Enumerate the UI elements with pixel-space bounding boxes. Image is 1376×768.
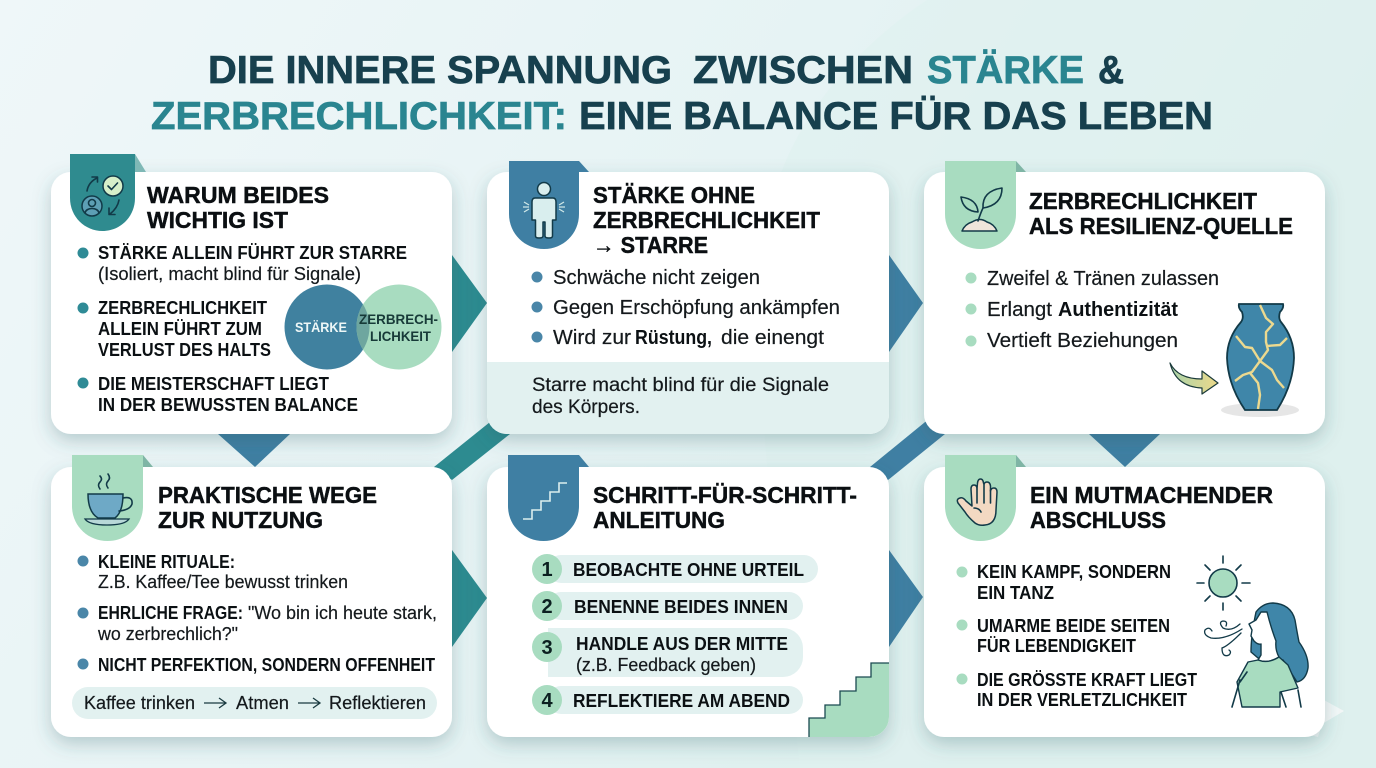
ribbon with cup icon: [72, 455, 153, 541]
bullet list: ZERBRECHLICHKEIT: [98, 298, 267, 318]
panel: zerbrechlichkeit als resilienz-quelle: [924, 161, 1325, 434]
heading: [1030, 482, 1273, 533]
heading: → STARRE: [593, 232, 708, 258]
bullet list: FÜR LEBENDIGKEIT: [977, 636, 1136, 656]
decorative end marker: [1310, 699, 1344, 737]
heading: ZUR NUTZUNG: [158, 507, 323, 533]
bullet list: Authentizität: [1058, 299, 1178, 321]
bullet list: [956, 562, 1197, 710]
heading: WARUM BEIDES: [147, 182, 329, 208]
bullet list: DIE GRÖSSTE KRAFT LIEGT: [977, 670, 1197, 690]
step 4: [532, 685, 803, 715]
arrow: diagonal card 2 to card 4: [434, 418, 510, 480]
flow pill: [72, 687, 437, 719]
ribbon with sprout icon: [945, 161, 1026, 249]
arrow: card 1 down to card 4: [218, 434, 290, 467]
bullet list: (Isoliert, macht blind für Signale): [98, 264, 361, 284]
bullet list: NICHT PERFEKTION, SONDERN OFFENHEIT: [98, 655, 435, 675]
footer note: [487, 362, 889, 434]
step 4: 4: [541, 690, 553, 712]
step 1: BEOBACHTE OHNE URTEIL: [573, 560, 804, 580]
panel: ein mutmachender abschluss: [924, 455, 1325, 737]
title: EINE BALANCE FÜR DAS LEBEN: [579, 95, 1213, 138]
heading: [1029, 188, 1293, 239]
step 3: 3: [541, 637, 553, 659]
ribbon with hand icon: [945, 455, 1026, 541]
ribbon with standing person icon: [509, 161, 589, 249]
step 2: BENENNE BEIDES INNEN: [574, 597, 788, 617]
flow pill: Kaffee trinken: [84, 693, 195, 713]
arrow: diagonal card 3 to card 5: [870, 418, 945, 480]
arrow: card 4 to card 5: [452, 550, 487, 647]
bullet list: ALLEIN FÜHRT ZUM: [98, 319, 262, 339]
step 3: HANDLE AUS DER MITTE: [576, 634, 788, 654]
heading: ALS RESILIENZ-QUELLE: [1029, 213, 1293, 239]
bullet list: Zweifel & Tränen zulassen: [987, 268, 1219, 290]
heading: ABSCHLUSS: [1030, 507, 1166, 533]
bullet list: UMARME BEIDE SEITEN: [977, 616, 1170, 636]
heading: SCHRITT-FÜR-SCHRITT-: [593, 482, 857, 508]
heading: [593, 182, 820, 258]
icon: kintsugi vase: [1221, 304, 1299, 417]
bullet list: die einengt: [721, 327, 824, 349]
bullet list: Gegen Erschöpfung ankämpfen: [553, 297, 840, 319]
heading: [593, 482, 857, 533]
bullet list: EIN TANZ: [977, 583, 1054, 603]
title: &: [1098, 49, 1124, 92]
panel: warum beides wichtig ist: [51, 154, 452, 434]
bullet list: KLEINE RITUALE:: [98, 552, 235, 572]
flow pill: Atmen: [236, 693, 289, 713]
footer note: Starre macht blind für die Signale: [532, 375, 829, 396]
arrow: card 2 to card 3: [889, 255, 923, 352]
step 2: [532, 591, 803, 621]
title: [151, 49, 1213, 138]
venn diagram: ZERBRECH-: [359, 311, 438, 327]
bullet list: IN DER VERLETZLICHKEIT: [977, 690, 1187, 710]
bullet list: KEIN KAMPF, SONDERN: [977, 562, 1171, 582]
step 1: [532, 554, 818, 584]
venn diagram: LICHKEIT: [370, 328, 431, 344]
bullet list: STÄRKE ALLEIN FÜHRT ZUR STARRE: [98, 243, 407, 263]
venn diagram: STÄRKE: [295, 319, 347, 335]
ribbon with stairs icon: [508, 455, 589, 541]
step 2: 2: [541, 596, 553, 618]
corner stairs: [809, 663, 889, 737]
bullet list: "Wo bin ich heute stark,: [248, 603, 437, 623]
venn diagram: [284, 284, 442, 370]
step 3: [532, 628, 803, 677]
footer note: des Körpers.: [532, 397, 640, 418]
heading: [158, 482, 377, 533]
title: STÄRKE: [927, 49, 1084, 92]
arrow: card 3 down to card 6: [1089, 434, 1160, 467]
title: ZWISCHEN: [693, 49, 913, 92]
bullet list: [78, 552, 437, 675]
heading: WICHTIG IST: [147, 207, 288, 233]
bullet list: EHRLICHE FRAGE:: [98, 603, 243, 623]
panel: praktische wege zur nutzung: [51, 455, 452, 737]
bullet list: Vertieft Beziehungen: [987, 330, 1178, 352]
heading: PRAKTISCHE WEGE: [158, 482, 377, 508]
arrow: card 5 to card 6: [889, 550, 923, 647]
bullet list: Erlangt: [987, 299, 1052, 321]
heading: [147, 182, 329, 233]
step 4: REFLEKTIERE AM ABEND: [573, 691, 790, 711]
icon: curved arrow: [1170, 363, 1218, 394]
flow pill: Reflektieren: [329, 693, 426, 713]
heading: ZERBRECHLICHKEIT: [1029, 188, 1257, 214]
bullet list: [966, 268, 1219, 352]
panel: schritt-fuer-schritt-anleitung: [487, 455, 889, 737]
bullet list: Rüstung,: [635, 327, 712, 349]
step 3: (z.B. Feedback geben): [576, 655, 756, 675]
bullet list: Z.B. Kaffee/Tee bewusst trinken: [98, 572, 348, 592]
bullet list: [78, 243, 407, 415]
heading: ANLEITUNG: [593, 507, 725, 533]
bullet list: wo zerbrechlich?": [97, 624, 238, 644]
heading: STÄRKE OHNE: [593, 182, 755, 208]
icon: sun: [1197, 556, 1250, 610]
bullet list: IN DER BEWUSSTEN BALANCE: [98, 395, 358, 415]
heading: ZERBRECHLICHKEIT: [593, 207, 820, 233]
bullet list: [532, 267, 840, 349]
bullet list: DIE MEISTERSCHAFT LIEGT: [98, 374, 329, 394]
bullet list: Schwäche nicht zeigen: [553, 267, 760, 289]
step 1: 1: [541, 559, 553, 581]
bullet list: Wird zur: [553, 327, 631, 349]
icon: woman breathing: [1205, 603, 1308, 707]
ribbon with cycle icon: [70, 154, 146, 231]
title: ZERBRECHLICHKEIT:: [151, 95, 567, 138]
title: DIE INNERE SPANNUNG: [208, 49, 672, 92]
heading: EIN MUTMACHENDER: [1030, 482, 1273, 508]
bullet list: VERLUST DES HALTS: [98, 340, 271, 360]
panel: staerke ohne zerbrechlichkeit: [487, 161, 889, 434]
arrow: card 1 to card 2: [452, 255, 487, 352]
